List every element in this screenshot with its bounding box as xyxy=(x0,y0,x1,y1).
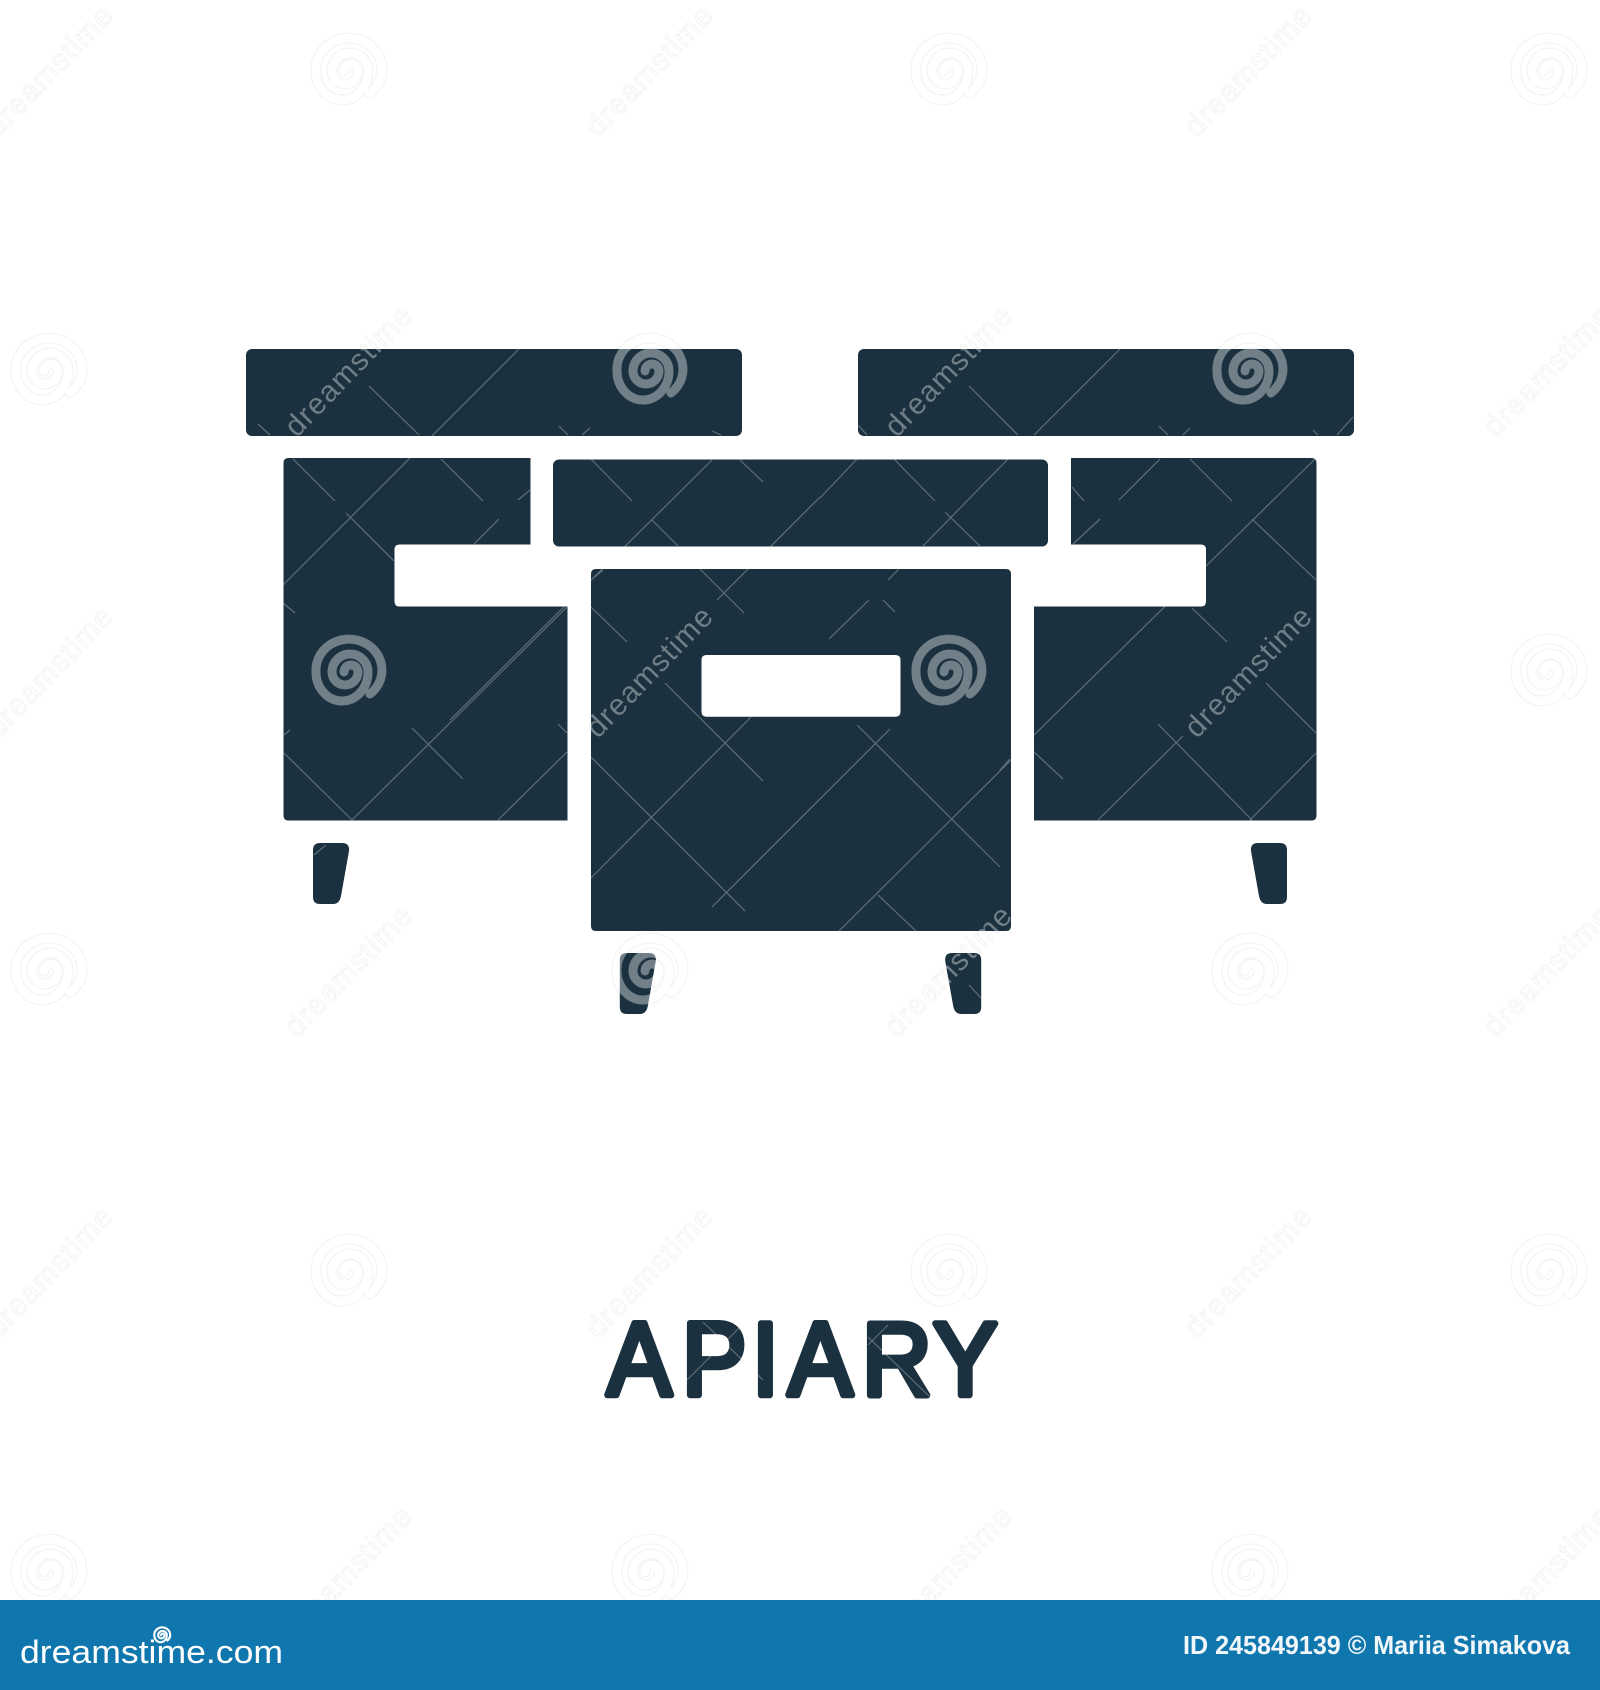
left hive roof xyxy=(246,349,742,436)
watermark: repeated wordmark: dreamstime xyxy=(1178,600,1319,744)
watermark: repeated wordmark: dreamstime xyxy=(278,899,419,1043)
centre hive roof xyxy=(553,460,1048,546)
watermark: diagonal lines xyxy=(258,348,1353,1397)
centre hive right leg xyxy=(945,953,981,1014)
watermark: repeated wordmark: dreamstime xyxy=(878,899,1019,1043)
right hive body xyxy=(1034,458,1316,820)
right hive leg xyxy=(1251,843,1287,904)
watermark: repeated wordmark: dreamstime xyxy=(878,1500,1019,1644)
left hive leg xyxy=(313,843,349,904)
watermark: repeated wordmark: dreamstime xyxy=(579,0,720,143)
left hive body xyxy=(284,458,568,820)
centre hive body with entrance slot xyxy=(591,569,1011,931)
icon: apiary with three beehives xyxy=(246,349,1354,1014)
right hive roof xyxy=(858,349,1354,436)
watermark: repeated wordmark: dreamstime xyxy=(1178,1200,1319,1344)
centre hive left leg xyxy=(620,953,656,1014)
footer logo: dreamstime.com: dreamstime.com xyxy=(20,1634,283,1670)
watermark: repeated wordmark: dreamstime xyxy=(579,600,720,744)
watermark: repeated wordmark: dreamstime xyxy=(579,1200,720,1344)
watermark: repeated wordmark: dreamstime xyxy=(1178,0,1319,143)
icon: logo spiral xyxy=(154,1627,170,1642)
footer credit: image id and author: ID 245849139 © Mariia Simakova xyxy=(1183,1630,1571,1660)
footer bar xyxy=(0,1600,1600,1690)
watermark: repeated wordmark: dreamstime xyxy=(878,299,1019,443)
title: APIARY xyxy=(607,1302,997,1418)
watermark: repeated wordmark: dreamstime xyxy=(278,1500,419,1644)
watermark: repeated wordmark: dreamstime xyxy=(278,299,419,443)
